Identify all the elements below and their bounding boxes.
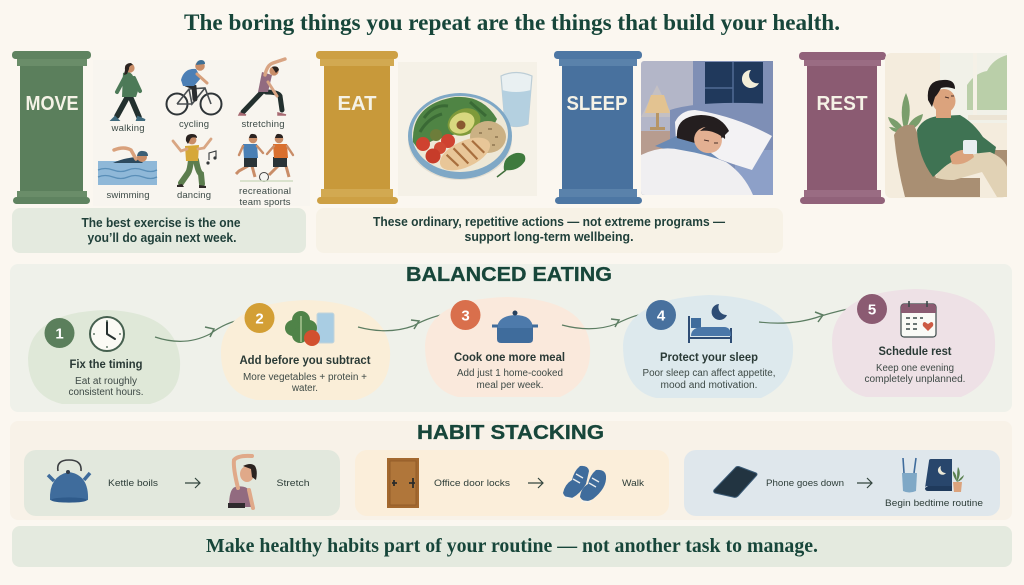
badge 5: 5 bbox=[868, 302, 876, 318]
arrow 2 to 3 bbox=[358, 313, 451, 331]
step 5: schedule rest: Keep one evening bbox=[876, 363, 954, 374]
icon: cycling bbox=[166, 60, 222, 114]
badge 1 bbox=[44, 318, 74, 348]
activity labels: team sports bbox=[240, 197, 291, 208]
title: The boring things you repeat are the things that build your health. bbox=[184, 10, 840, 36]
activity labels bbox=[106, 119, 291, 208]
caption: repetitive actions bbox=[316, 208, 783, 253]
step 5: schedule rest: completely unplanned. bbox=[864, 374, 966, 385]
panel: eat illustration bbox=[398, 62, 537, 196]
caption: repetitive actions: These ordinary, repetitive actions — not extreme programs — bbox=[373, 214, 725, 229]
icon: blanket bbox=[641, 148, 753, 195]
icon: armchair bbox=[894, 125, 1007, 197]
step 4: protect your sleep: mood and motivation. bbox=[660, 380, 758, 391]
icon: man with mug bbox=[917, 80, 1007, 197]
heading: habit stacking: HABIT STACKING bbox=[417, 422, 604, 444]
icon: sleeping woman bbox=[655, 115, 729, 162]
icon: lamp bbox=[641, 95, 671, 155]
icon: phone bbox=[714, 466, 757, 497]
step 4: protect your sleep bbox=[623, 295, 793, 398]
icon: greens and water bbox=[285, 311, 334, 346]
icon: dancing bbox=[173, 134, 217, 188]
icon: sneakers bbox=[563, 466, 606, 502]
habit: door to walk: Walk bbox=[622, 478, 644, 489]
activity labels: walking bbox=[110, 123, 144, 134]
habit: phone to bedtime routine: Begin bedtime routine bbox=[885, 498, 983, 509]
caption: exercise: The best exercise is the one bbox=[82, 215, 240, 230]
icon: stretching woman bbox=[228, 456, 257, 508]
icon: salad bowl bbox=[408, 93, 512, 180]
step 1: fix the timing: Eat at roughly bbox=[75, 376, 137, 387]
badge 3: 3 bbox=[461, 308, 470, 324]
step 3: cook one more meal bbox=[425, 297, 590, 397]
step 2: add before you subtract: More vegetables + protein + bbox=[243, 372, 367, 383]
habit: door to walk bbox=[355, 450, 669, 516]
icon: bedtime items bbox=[902, 458, 964, 492]
icon: clock bbox=[90, 317, 124, 351]
step 2: add before you subtract: water. bbox=[291, 383, 318, 394]
activity labels: stretching bbox=[242, 119, 284, 130]
pillar: eat bbox=[316, 51, 398, 204]
pillar: rest bbox=[799, 52, 886, 204]
step 3: cook one more meal: Add just 1 home-cooked bbox=[457, 368, 563, 379]
habit: kettle to stretch bbox=[24, 450, 340, 516]
activity labels: swimming bbox=[106, 190, 150, 201]
step 4: protect your sleep: Protect your sleep bbox=[660, 352, 758, 364]
badge 4: 4 bbox=[657, 308, 666, 324]
icon: pillow bbox=[675, 110, 772, 170]
icon: walking bbox=[112, 63, 145, 120]
activity labels: recreational bbox=[239, 186, 291, 197]
activity labels: cycling bbox=[179, 119, 209, 130]
icon: recreational team sports bbox=[236, 134, 293, 182]
step 1: fix the timing bbox=[28, 310, 180, 404]
step 4: protect your sleep: Poor sleep can affect appetite, bbox=[642, 368, 776, 379]
badge 2: 2 bbox=[255, 310, 264, 328]
panel: balanced eating bbox=[10, 264, 1012, 412]
step 3: cook one more meal: Cook one more meal bbox=[454, 352, 565, 364]
step 3: cook one more meal: meal per week. bbox=[476, 380, 544, 391]
closing banner: Make healthy habits part of your routine — not another task to manage. bbox=[206, 535, 818, 557]
arrow 4 to 5 bbox=[759, 307, 858, 323]
panel: habit stacking bbox=[10, 421, 1012, 520]
panel: move activities bbox=[93, 59, 310, 208]
icon: calendar bbox=[901, 301, 936, 337]
habit: phone to bedtime routine bbox=[684, 450, 1000, 516]
panel: rest illustration bbox=[885, 53, 1007, 198]
icon: plant bbox=[888, 93, 923, 132]
habit: door to walk: Office door locks bbox=[434, 478, 510, 489]
icon: cooking pot bbox=[492, 310, 538, 343]
icon: kettle bbox=[48, 460, 90, 503]
badge 1: 1 bbox=[55, 326, 64, 342]
habit: phone to bedtime routine: Phone goes down bbox=[766, 478, 844, 489]
pillar: move bbox=[12, 51, 91, 204]
habit: kettle to stretch: Kettle boils bbox=[108, 478, 158, 489]
badge 2 bbox=[244, 303, 274, 333]
badge 3 bbox=[450, 300, 480, 330]
step 1: fix the timing: consistent hours. bbox=[68, 387, 144, 398]
icon: moon bbox=[742, 70, 759, 88]
step 5: schedule rest bbox=[832, 289, 995, 397]
icon: swimming bbox=[98, 148, 157, 185]
badge 4 bbox=[646, 300, 676, 330]
panel: sleep illustration bbox=[641, 61, 773, 195]
badge 5 bbox=[857, 294, 887, 324]
arrow 3 to 4 bbox=[562, 313, 647, 329]
caption: exercise: you’ll do again next week. bbox=[88, 230, 236, 245]
pillar: sleep bbox=[554, 51, 642, 204]
arrow 1 to 2 bbox=[155, 319, 244, 341]
icon: spinach leaf bbox=[497, 153, 525, 177]
pillar: move: MOVE bbox=[26, 93, 78, 115]
icon: bed and moon bbox=[689, 304, 731, 343]
heading: balanced eating: BALANCED EATING bbox=[406, 264, 612, 286]
arrow bbox=[528, 478, 543, 488]
caption: exercise bbox=[12, 208, 306, 253]
step 2: add before you subtract bbox=[221, 300, 390, 400]
pillar: sleep: SLEEP bbox=[566, 93, 628, 115]
step 5: schedule rest: Schedule rest bbox=[878, 346, 952, 358]
icon: water glass bbox=[501, 72, 532, 126]
pillar: rest: REST bbox=[816, 93, 868, 115]
closing banner bbox=[12, 526, 1012, 567]
icon: stretching bbox=[239, 59, 286, 115]
activity labels: dancing bbox=[177, 190, 211, 201]
step 2: add before you subtract: Add before you subtract bbox=[240, 355, 371, 367]
arrow bbox=[857, 478, 872, 488]
caption: repetitive actions: support long-term wellbeing. bbox=[464, 229, 634, 244]
step 1: fix the timing: Fix the timing bbox=[70, 359, 142, 371]
icon: door bbox=[387, 458, 419, 508]
habit: kettle to stretch: Stretch bbox=[276, 478, 310, 489]
pillar: eat: EAT bbox=[338, 93, 376, 115]
arrow bbox=[185, 478, 200, 488]
